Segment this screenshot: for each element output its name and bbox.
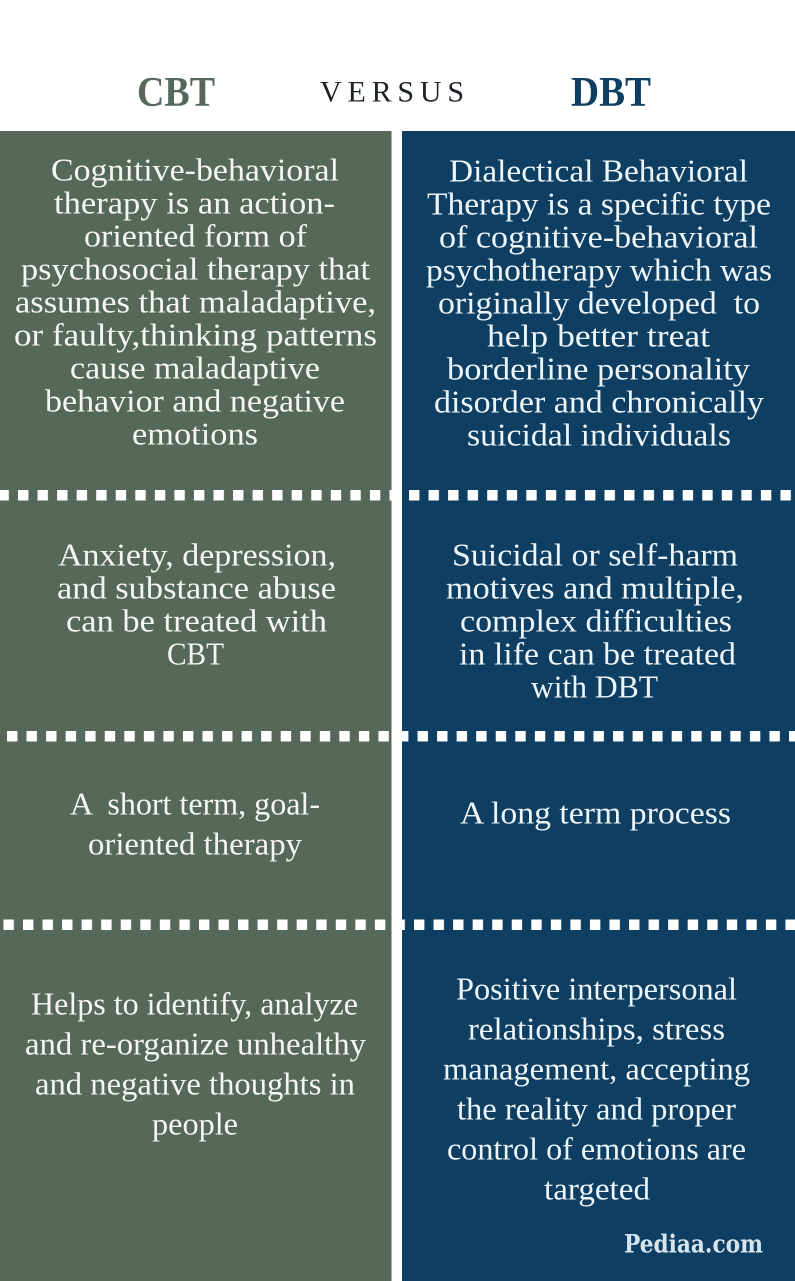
text: CBT treats: can be treated with [66,604,327,638]
text: CBT definition: assumes that maladaptive, [15,284,376,320]
text: CBT duration: A short term, goal- [70,786,320,822]
text: DBT definition: suicidal individuals [467,418,731,452]
text: DBT definition: help better treat [487,318,710,354]
text: CBT treats: CBT [167,636,224,672]
text: CBT goals: Helps to identify, analyze [31,986,358,1022]
text: DBT goals [443,972,750,1206]
heading: VERSUS: VERSUS [320,76,464,108]
text: DBT treats [446,538,744,704]
text: CBT goals: and re-organize unhealthy [25,1026,366,1062]
divider: row 2 dotted line [0,731,795,742]
divider: row 3 dotted line [0,920,795,930]
text: DBT goals: the reality and proper [457,1092,737,1126]
text: DBT definition: psychotherapy which was [426,252,772,288]
text: DBT definition: Therapy is a specific type [427,186,771,222]
text: CBT duration [70,786,320,862]
heading: CBT: CBT [137,70,215,116]
text: CBT goals: and negative thoughts in [35,1066,355,1102]
text: DBT treats: Suicidal or self-harm [452,538,739,572]
text: CBT duration: oriented therapy [88,826,302,862]
text: DBT definition: disorder and chronically [434,384,764,420]
panel: DBT column background [402,131,795,1281]
text: DBT goals: Positive interpersonal [456,972,737,1006]
text: DBT goals: targeted [544,1172,650,1206]
text: CBT definition [14,152,377,452]
text: CBT definition: or faulty,thinking patterns [14,318,377,352]
text: DBT goals: control of emotions are [447,1132,746,1166]
text: DBT definition: Dialectical Behavioral [449,154,748,188]
text: CBT definition: behavior and negative [45,384,345,418]
text: CBT goals: people [152,1106,238,1142]
text: CBT definition: Cognitive-behavioral [51,152,339,188]
text: DBT treats: with DBT [531,670,658,704]
text: CBT treats: and substance abuse [57,570,336,606]
text: DBT treats: motives and multiple, [446,570,744,606]
text: CBT definition: cause maladaptive [70,350,320,386]
text: DBT definition [426,154,772,452]
text: CBT definition: emotions [132,416,258,452]
divider: row 1 dotted line [0,490,795,500]
text: CBT definition: psychosocial therapy that [21,252,370,286]
panel: CBT column background [0,131,392,1281]
text: DBT goals: management, accepting [443,1052,750,1086]
text: DBT treats: in life can be treated [459,636,736,672]
text: DBT goals: relationships, stress [468,1012,725,1046]
text: CBT definition: oriented form of [84,218,308,254]
text: DBT definition: originally developed to [438,286,760,320]
text: DBT definition: of cognitive-behavioral [439,220,758,254]
text: CBT definition: therapy is an action- [54,186,335,220]
text: CBT goals [25,986,366,1142]
text: DBT treats: complex difficulties [460,604,732,638]
logo: Pediaa.com: Pediaa.com [624,1230,763,1258]
text: CBT treats [57,538,336,672]
text: DBT definition: borderline personality [447,352,750,386]
text: CBT treats: Anxiety, depression, [58,538,336,572]
text: DBT duration: A long term process [460,796,731,830]
heading: DBT: DBT [571,70,651,116]
